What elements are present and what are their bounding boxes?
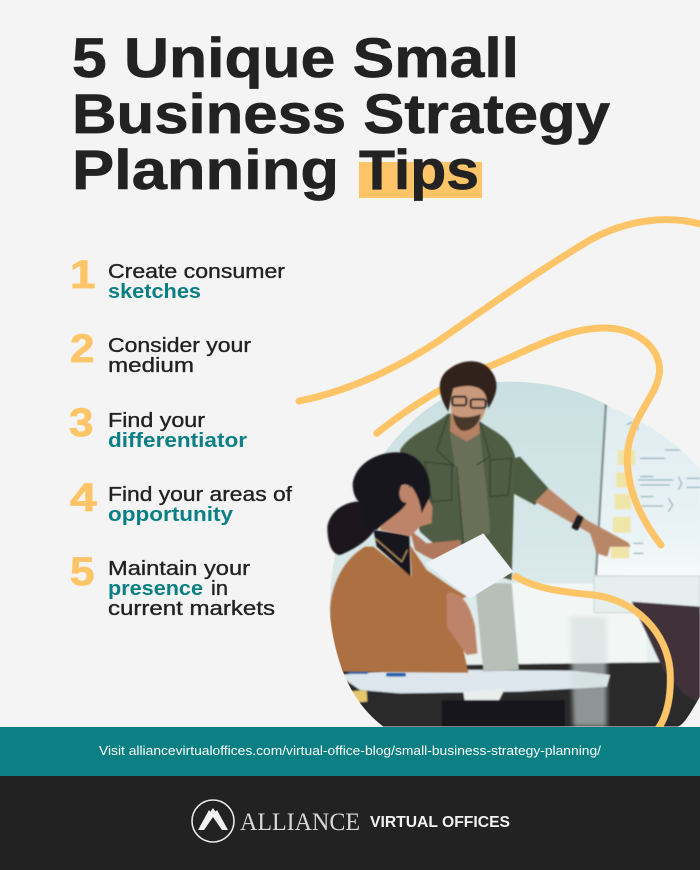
logo wordmark: ALLIANCE (240, 809, 360, 836)
tip 2: 2 (70, 326, 94, 371)
tip 5: Maintain your (108, 558, 250, 580)
tip 5: current markets (108, 598, 275, 620)
tip 2: medium (108, 355, 194, 377)
tip 1: 1 (70, 253, 96, 297)
footer with logo (0, 776, 700, 870)
title: Planning (72, 138, 339, 201)
photo background (320, 377, 700, 730)
tip 3 (69, 400, 247, 452)
logo icon (192, 800, 234, 842)
logo tagline: VIRTUAL OFFICES (370, 814, 510, 831)
tip 5: presence (108, 578, 203, 600)
tip 5: 5 (70, 549, 94, 594)
seated woman (330, 530, 477, 673)
tip 4: opportunity (108, 504, 234, 526)
title: 5 Unique Small (72, 26, 519, 89)
woman's head (327, 452, 433, 555)
photo: meeting at whiteboard (320, 328, 700, 730)
title: Business Strategy (72, 82, 610, 145)
paper in presenter's hand (425, 533, 513, 598)
tip 1 (70, 253, 285, 303)
title (72, 26, 610, 201)
tip 3: Find your (108, 410, 205, 432)
title: Tips (359, 138, 479, 201)
website banner (0, 727, 700, 776)
decorative swoosh: top (299, 220, 700, 401)
tip 2: Consider your (108, 335, 251, 357)
tip 5 (70, 549, 275, 620)
tip 5: in (211, 578, 228, 600)
tip 4 (70, 476, 292, 526)
tip 1: sketches (108, 281, 201, 303)
swoosh on lower right (513, 575, 670, 728)
tip 2 (70, 326, 251, 377)
tip 3: differentiator (108, 430, 247, 452)
swoosh passing behind the presenter and over the whiteboard (377, 328, 661, 545)
website banner: Visit alliancevirtualoffices.com/virtual-office-blog/small-business-strategy-planning/ (99, 743, 601, 758)
tip 1: Create consumer (108, 261, 285, 283)
presenter (400, 361, 631, 672)
list of five tips (69, 253, 292, 620)
tip 4: 4 (70, 476, 97, 520)
tip 4: Find your areas of (108, 484, 292, 506)
tip 3: 3 (69, 400, 93, 445)
